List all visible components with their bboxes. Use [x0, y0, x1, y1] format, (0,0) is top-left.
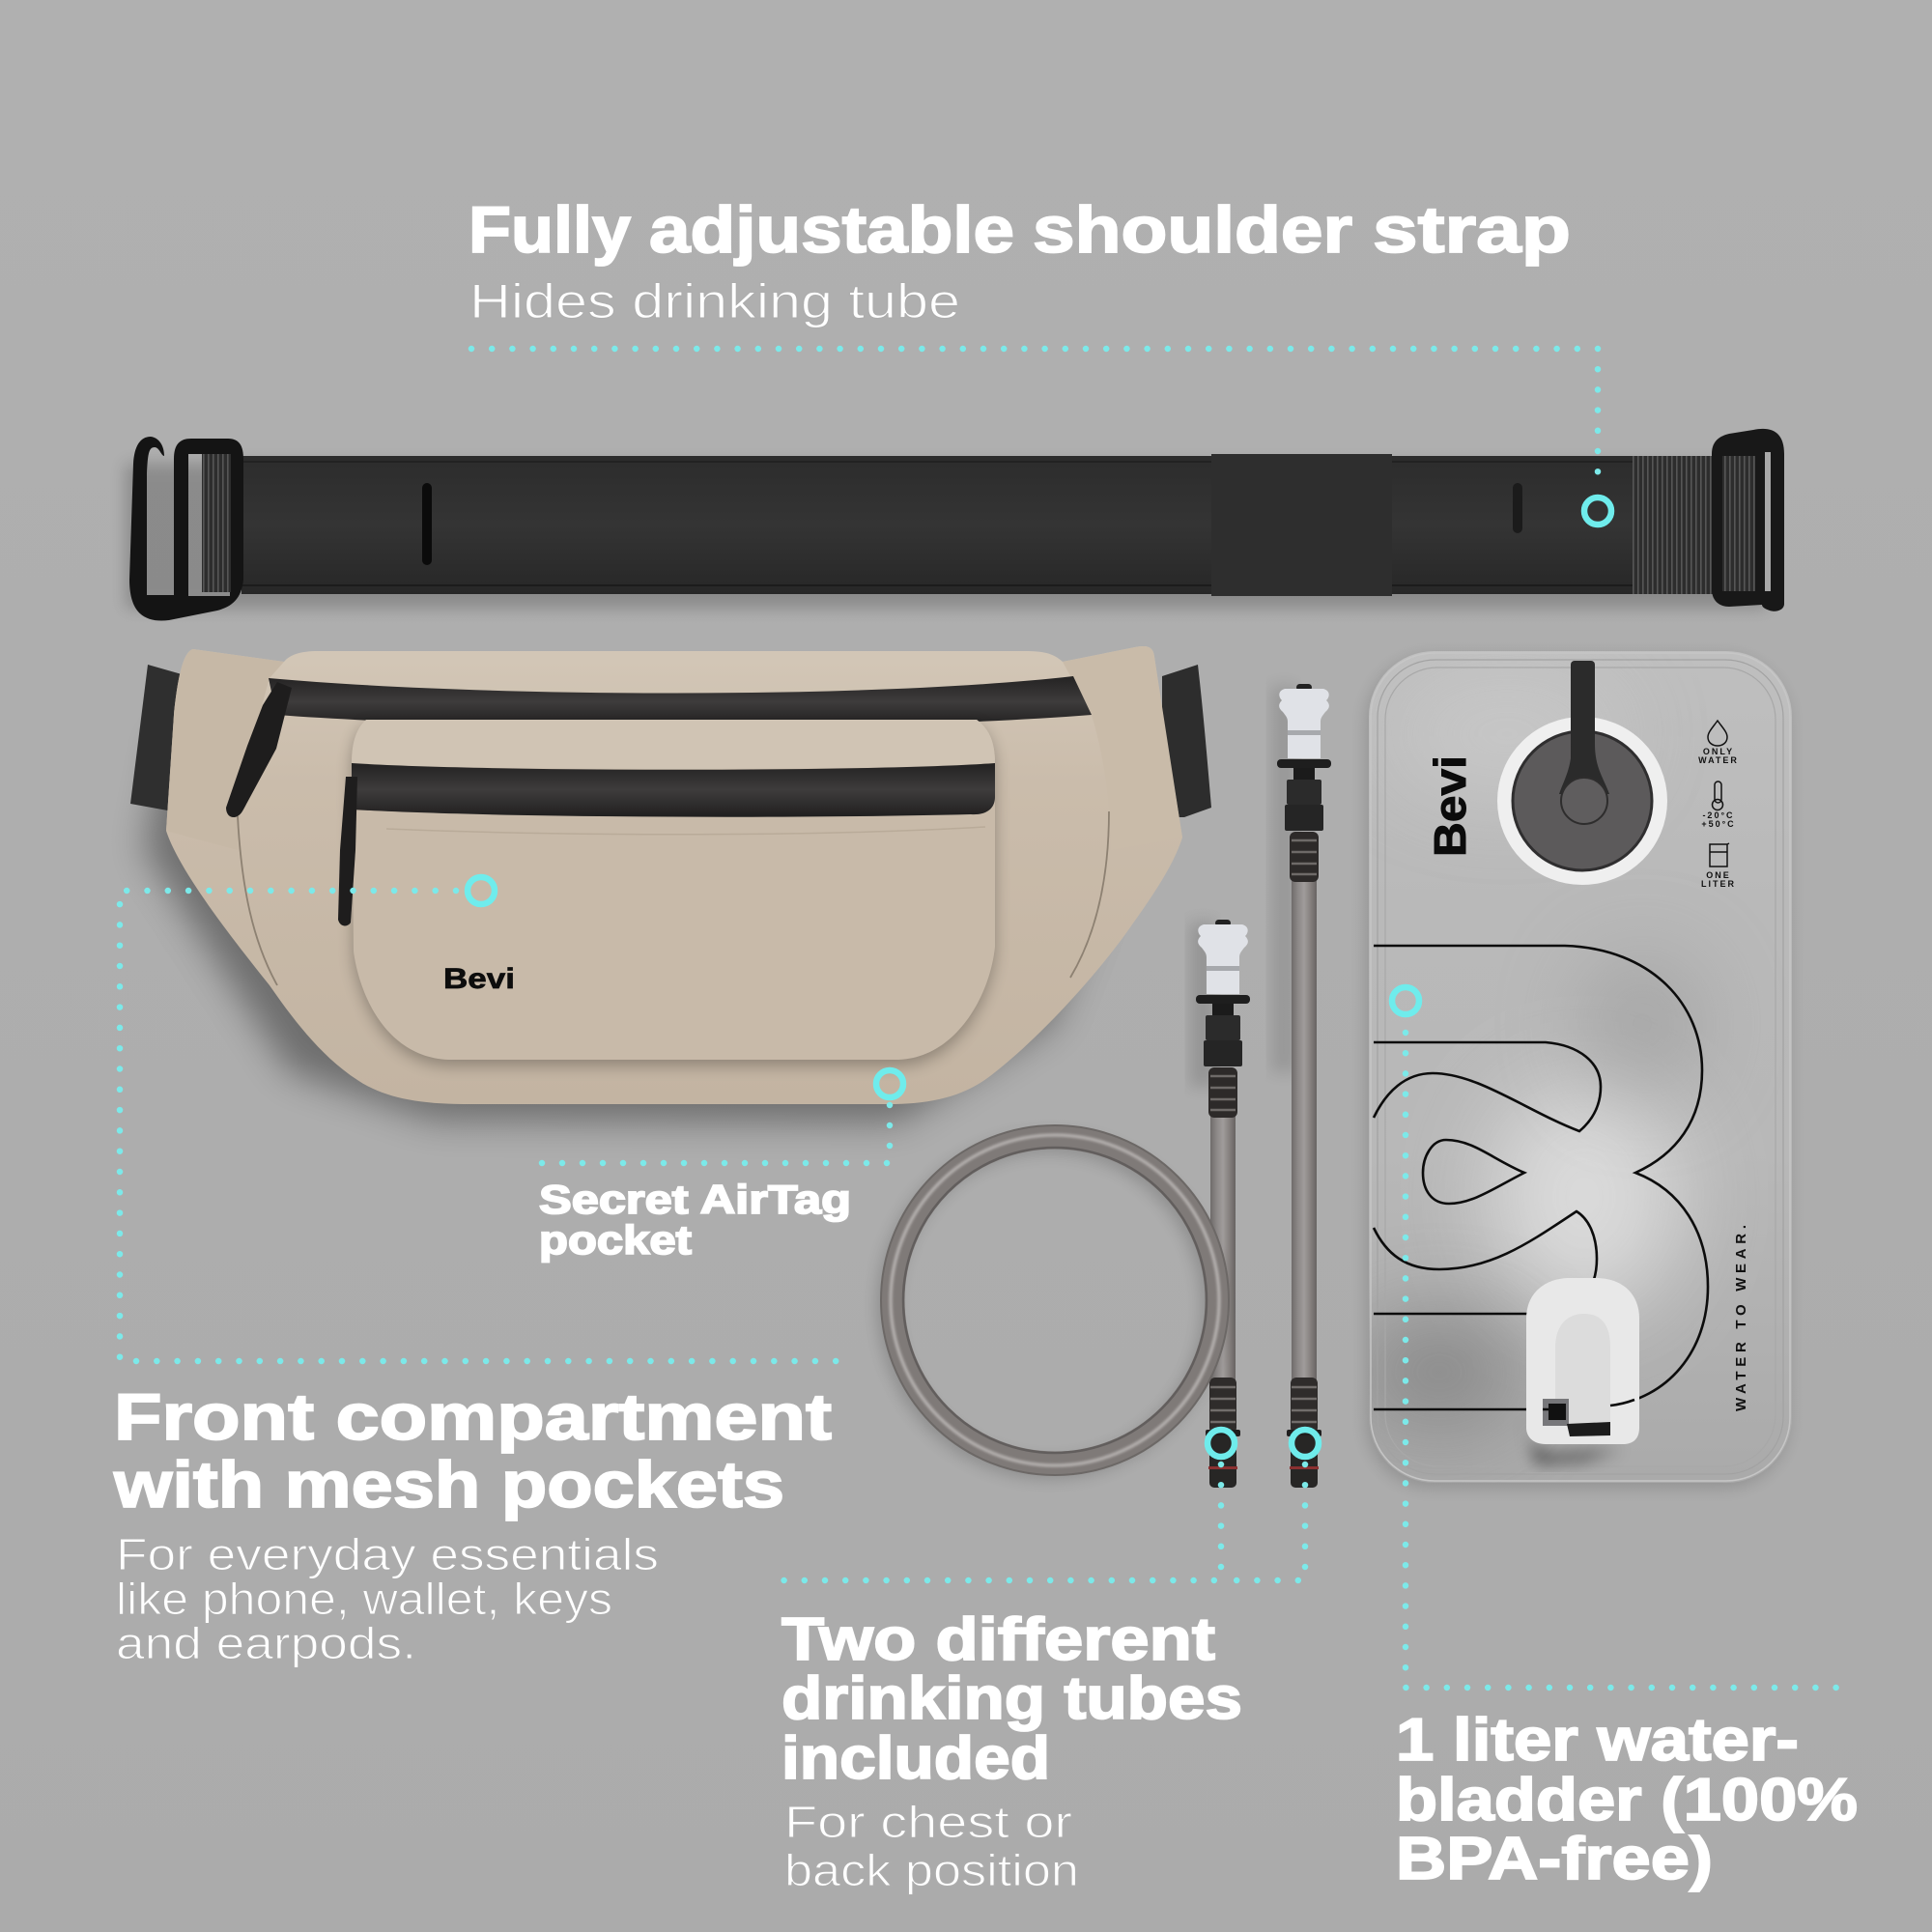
bladder clip	[1524, 1278, 1639, 1463]
icon: temperature	[1701, 781, 1736, 829]
callout: front compartment: and earpods.	[116, 1618, 416, 1668]
pocket zipper	[352, 763, 995, 817]
callout: front compartment: like phone, wallet, keys	[116, 1574, 612, 1624]
right buckle	[1712, 429, 1784, 611]
drinking tube short with coil	[881, 920, 1250, 1488]
marker: front compartment	[468, 877, 495, 904]
marker: shoulder strap	[1584, 497, 1611, 525]
leader: long tube	[1221, 1464, 1305, 1580]
callout: water bladder: 1 liter water-	[1396, 1707, 1799, 1774]
icon: only water	[1698, 721, 1739, 765]
marker: long tube	[1292, 1430, 1319, 1457]
callout: shoulder strap heading: Fully	[469, 193, 631, 267]
main zipper	[269, 676, 1092, 727]
callout: shoulder strap heading: shoulder	[1033, 193, 1352, 267]
shoulder strap	[126, 429, 1784, 621]
icon: one liter: ONE	[1706, 870, 1731, 880]
coiled tube	[881, 1125, 1229, 1475]
leader: drinking tubes	[780, 1464, 1221, 1580]
icon: one liter: LITER	[1701, 879, 1736, 889]
icon: temperature: +50°C	[1701, 819, 1736, 829]
callout: secret AirTag pocket: pocket	[539, 1217, 692, 1263]
ampersand line art	[1374, 946, 1708, 1409]
short mouthpiece	[1196, 920, 1250, 1118]
callout: drinking tubes: back position	[784, 1845, 1079, 1895]
callout: front compartment: For everyday essentials	[116, 1529, 659, 1579]
front pocket	[352, 720, 995, 1065]
water bladder	[1352, 651, 1792, 1488]
callout: drinking tubes: drinking tubes	[781, 1665, 1242, 1732]
drinking tube long	[1271, 684, 1331, 1488]
callout: front compartment: Front compartment	[114, 1380, 832, 1454]
icon: one liter	[1701, 843, 1736, 889]
long tube shaft	[1292, 874, 1317, 1386]
zip pull: pocket	[338, 777, 357, 925]
leader: shoulder strap	[471, 349, 1598, 487]
callout: drinking tubes: For chest or	[784, 1797, 1072, 1847]
waist straps	[130, 665, 1211, 817]
bladder tagline: WATER TO WEAR.	[1733, 1225, 1749, 1411]
callout: water bladder: BPA-free)	[1396, 1826, 1713, 1892]
bag shadow	[145, 734, 1111, 1122]
marker: AirTag pocket	[876, 1070, 903, 1097]
callout: shoulder strap heading: Hides drinking tube	[469, 274, 960, 328]
belt bag	[130, 646, 1211, 1122]
icon: only water: ONLY	[1703, 747, 1734, 756]
callout: drinking tubes: Two different	[781, 1606, 1215, 1673]
bag body	[166, 646, 1182, 1104]
callout: front compartment	[113, 1380, 832, 1668]
short tube foot	[1206, 1378, 1240, 1488]
long mouthpiece	[1277, 684, 1331, 882]
icon: only water: WATER	[1698, 755, 1739, 765]
callout: water bladder: bladder (100%	[1396, 1767, 1858, 1833]
leader: water bladder	[1406, 1033, 1837, 1688]
leader: front compartment	[120, 891, 838, 1361]
callout: front compartment: with mesh pockets	[113, 1448, 784, 1521]
callout: secret AirTag pocket: Secret AirTag	[539, 1177, 851, 1222]
left buckle	[129, 437, 243, 621]
zip pull: main	[226, 682, 292, 817]
callout: shoulder strap heading	[469, 193, 1571, 328]
leader: AirTag pocket	[539, 1105, 890, 1163]
marker: water bladder	[1392, 987, 1419, 1014]
long tube foot	[1287, 1378, 1321, 1488]
bladder cap	[1497, 661, 1667, 885]
marker: short tube	[1208, 1430, 1235, 1457]
callout: drinking tubes: included	[781, 1725, 1050, 1792]
logo: Bevi on bag: Bevi	[443, 963, 515, 995]
callout: shoulder strap heading: strap	[1373, 193, 1571, 267]
callout: secret AirTag pocket	[539, 1177, 851, 1263]
callout: drinking tubes	[781, 1606, 1242, 1895]
icon: temperature: -20°C	[1702, 810, 1735, 820]
callout: shoulder strap heading: adjustable	[649, 193, 1014, 267]
callout: water bladder	[1396, 1707, 1858, 1892]
logo: Bevi on bladder: Bevi	[1425, 755, 1475, 857]
short tube shaft	[1210, 1111, 1236, 1391]
